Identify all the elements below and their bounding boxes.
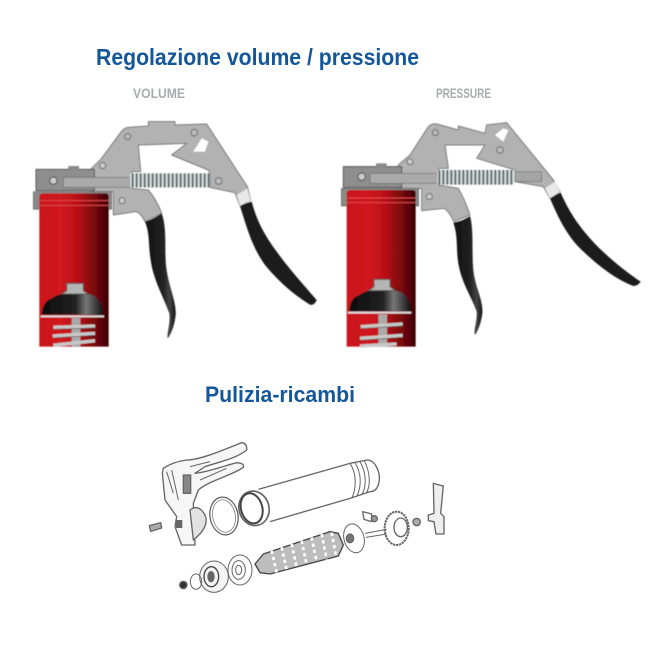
rear handle: [240, 202, 317, 305]
handle highlight: [237, 188, 251, 206]
latch cutout: [495, 128, 508, 142]
small screw: [149, 523, 162, 531]
grey lever body: [398, 123, 560, 222]
piston: [349, 290, 411, 311]
piston spring: [255, 532, 343, 574]
spring: [130, 173, 210, 187]
front grip: [453, 216, 482, 335]
spring: [437, 170, 515, 185]
collar: [341, 188, 419, 206]
pump head: [36, 169, 94, 191]
piston: [42, 293, 103, 315]
label: pressure: PRESSURE: [436, 85, 491, 101]
collar: [33, 192, 112, 209]
label: volume: VOLUME: [133, 85, 185, 101]
threaded collar: [235, 488, 273, 529]
T handle: [428, 483, 444, 534]
pump head: [343, 167, 402, 187]
piston spring: [378, 314, 387, 347]
front grip: [145, 213, 176, 338]
piston spring: [72, 318, 80, 347]
barrel: [258, 460, 379, 522]
seal discs: [228, 555, 252, 585]
grease gun: volume setting: [33, 122, 317, 347]
large ring: [341, 522, 367, 555]
grease gun: pressure setting: [341, 123, 641, 347]
gun head and levers: [162, 443, 247, 545]
toothed disc: [385, 512, 409, 545]
rear handle: [550, 193, 641, 286]
nut: [413, 518, 420, 526]
end nut: [180, 581, 187, 589]
latch cutout: [193, 138, 208, 152]
exploded parts diagram: [149, 443, 444, 592]
title: cleaning and spare parts: Pulizia-ricambi: [205, 382, 355, 407]
thin ring gasket: [207, 495, 241, 537]
title: volume / pressure adjustment: Regolazione volume / pressione: [96, 44, 419, 70]
grey lever body: [91, 122, 251, 222]
clip: [363, 512, 372, 522]
red cylinder: [39, 193, 109, 347]
rod: [365, 529, 387, 537]
red cylinder: [347, 190, 416, 347]
handle highlight: [545, 182, 560, 198]
